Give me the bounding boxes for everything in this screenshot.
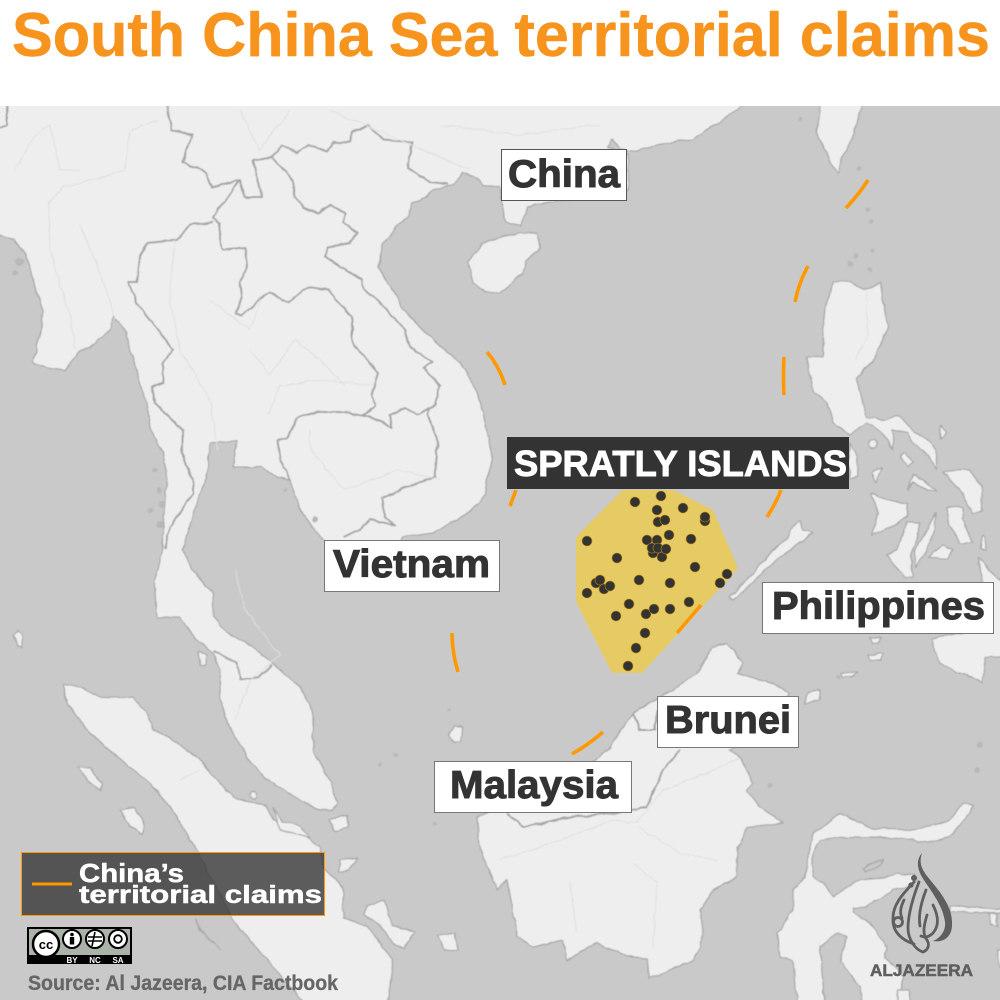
label: Vietnam: Vietnam — [333, 543, 490, 586]
label: Malaysia: Malaysia — [450, 764, 618, 807]
label: China: China — [508, 153, 620, 196]
source note: Source: Al Jazeera, CIA Factbook — [28, 972, 338, 995]
small islands — [12, 117, 983, 825]
legend: China's territorial claims: China’s — [79, 858, 184, 888]
rivers and provincial lines — [15, 110, 868, 950]
label: Spratly Islands: SPRATLY ISLANDS — [514, 443, 847, 484]
territorial claim zone: Spratly Islands area — [576, 490, 738, 673]
legend: China's territorial claims: territorial claims — [79, 881, 322, 909]
icon: Creative Commons BY-NC-SA badge: SA — [112, 956, 124, 965]
logo: Al Jazeera — [870, 853, 973, 980]
label: Philippines: Philippines — [772, 585, 985, 628]
icon: Creative Commons BY-NC-SA badge: BY — [66, 956, 78, 965]
island dots — [582, 491, 732, 671]
China's claim line segments — [452, 180, 868, 754]
icon: Creative Commons BY-NC-SA badge — [27, 927, 132, 965]
title: South China Sea territorial claims — [12, 1, 990, 70]
icon: Creative Commons BY-NC-SA badge: cc — [39, 937, 53, 952]
legend: China's territorial claims — [22, 852, 324, 916]
label: Malaysia — [434, 762, 632, 812]
logo: Al Jazeera: ALJAZEERA — [870, 962, 973, 980]
label: Brunei: Brunei — [665, 699, 791, 742]
icon: Creative Commons BY-NC-SA badge: NC — [89, 956, 101, 965]
country borders — [0, 95, 680, 827]
